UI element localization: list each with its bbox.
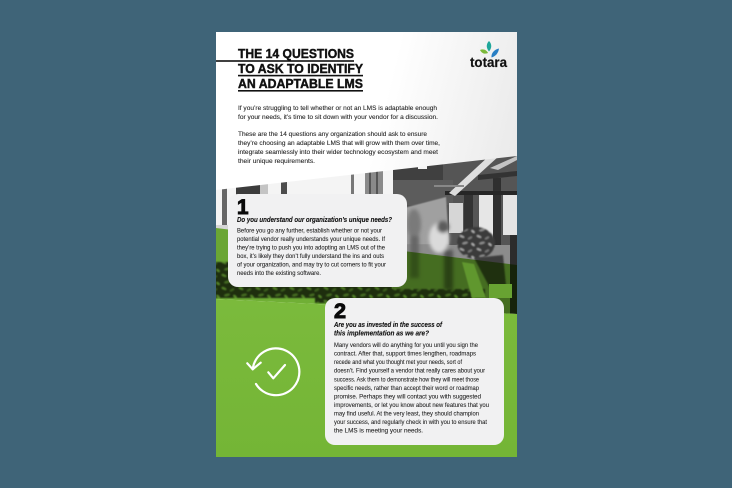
- card 1: understand needs: of your organization, and may try to cut corners to fit your: [237, 262, 387, 268]
- card 1: understand needs: Before you go any further, establish whether or not your: [237, 228, 383, 234]
- card 2: invested in success: contract. After that, support times lengthen, roadmaps: [334, 351, 477, 358]
- plant and planter boxes: [457, 227, 512, 298]
- card 2: invested in success: recede and what you thought met your needs, sort of: [334, 359, 462, 366]
- card 2: invested in success: Are you as invested in the success of: [333, 320, 443, 329]
- intro text: for your needs, it’s time to sit down with your vendor for a discussion.: [238, 114, 438, 121]
- page sheet: [216, 32, 517, 457]
- office photo with green tint: [212, 150, 517, 320]
- card 2: invested in success: this implementation as we are?: [334, 328, 430, 338]
- intro text: [238, 105, 440, 165]
- card 1: understand needs: they’re trying to push you into adopting an LMS out of the: [237, 244, 385, 252]
- card 2: invested in success: may find useful. At the very least, they should champion: [334, 410, 479, 418]
- card 2: invested in success: improvements, or let you know about new features that you: [334, 402, 489, 409]
- card 1: understand needs: needs into the existing software.: [237, 270, 321, 277]
- staircase: [404, 197, 449, 245]
- card 2: invested in success: [325, 298, 504, 445]
- card 1: understand needs: [228, 194, 407, 287]
- card 1: understand needs: Do you understand our organization’s unique needs?: [237, 215, 393, 224]
- card 1: understand needs: 1: [237, 196, 249, 219]
- card 2: invested in success: 2: [334, 300, 346, 323]
- intro text: If you’re struggling to tell whether or not an LMS is adaptable enough: [238, 105, 437, 112]
- card 2: invested in success: specific needs, rather than accept their word or roadmap: [334, 385, 479, 392]
- intro text: their unique requirements.: [238, 158, 315, 165]
- intro text: These are the 14 questions any organization should ask to ensure: [238, 131, 427, 138]
- card 2: invested in success: success. Ask them to demonstrate how they will meet those: [334, 376, 479, 383]
- intro text: integrate seamlessly into their wider technology ecosystem and meet: [238, 149, 438, 156]
- card 2: invested in success: promise. Perhaps they will contact you with suggested: [334, 393, 481, 400]
- green lower panel: [216, 299, 517, 457]
- card 2: invested in success: your success, and regularly check in with you to ensure that: [334, 419, 487, 426]
- blurred walking people: [407, 209, 453, 290]
- title: TO ASK TO IDENTIFY: [238, 61, 363, 76]
- icon: circular arrow with check mark: [247, 348, 299, 395]
- title: [216, 46, 363, 92]
- totara logo: totara: [470, 54, 507, 70]
- card 1: understand needs: box, it’s likely they don’t fully understand the ins and outs: [237, 253, 385, 260]
- infographic document on teal background: [216, 32, 517, 457]
- intro text: they’re choosing an adaptable LMS that will grow with them over time,: [238, 140, 440, 147]
- totara logo: [470, 41, 507, 70]
- card 2: invested in success: Many vendors will do anything for you until you sign the: [334, 342, 478, 349]
- card 1: understand needs: potential vendor really understands your unique needs. If: [237, 236, 385, 243]
- card 2: invested in success: the LMS is meeting your needs.: [334, 428, 423, 434]
- title: THE 14 QUESTIONS: [238, 46, 354, 61]
- card 2: invested in success: doesn’t. Find yourself a vendor that really cares about your: [334, 368, 486, 375]
- title: AN ADAPTABLE LMS: [238, 76, 363, 91]
